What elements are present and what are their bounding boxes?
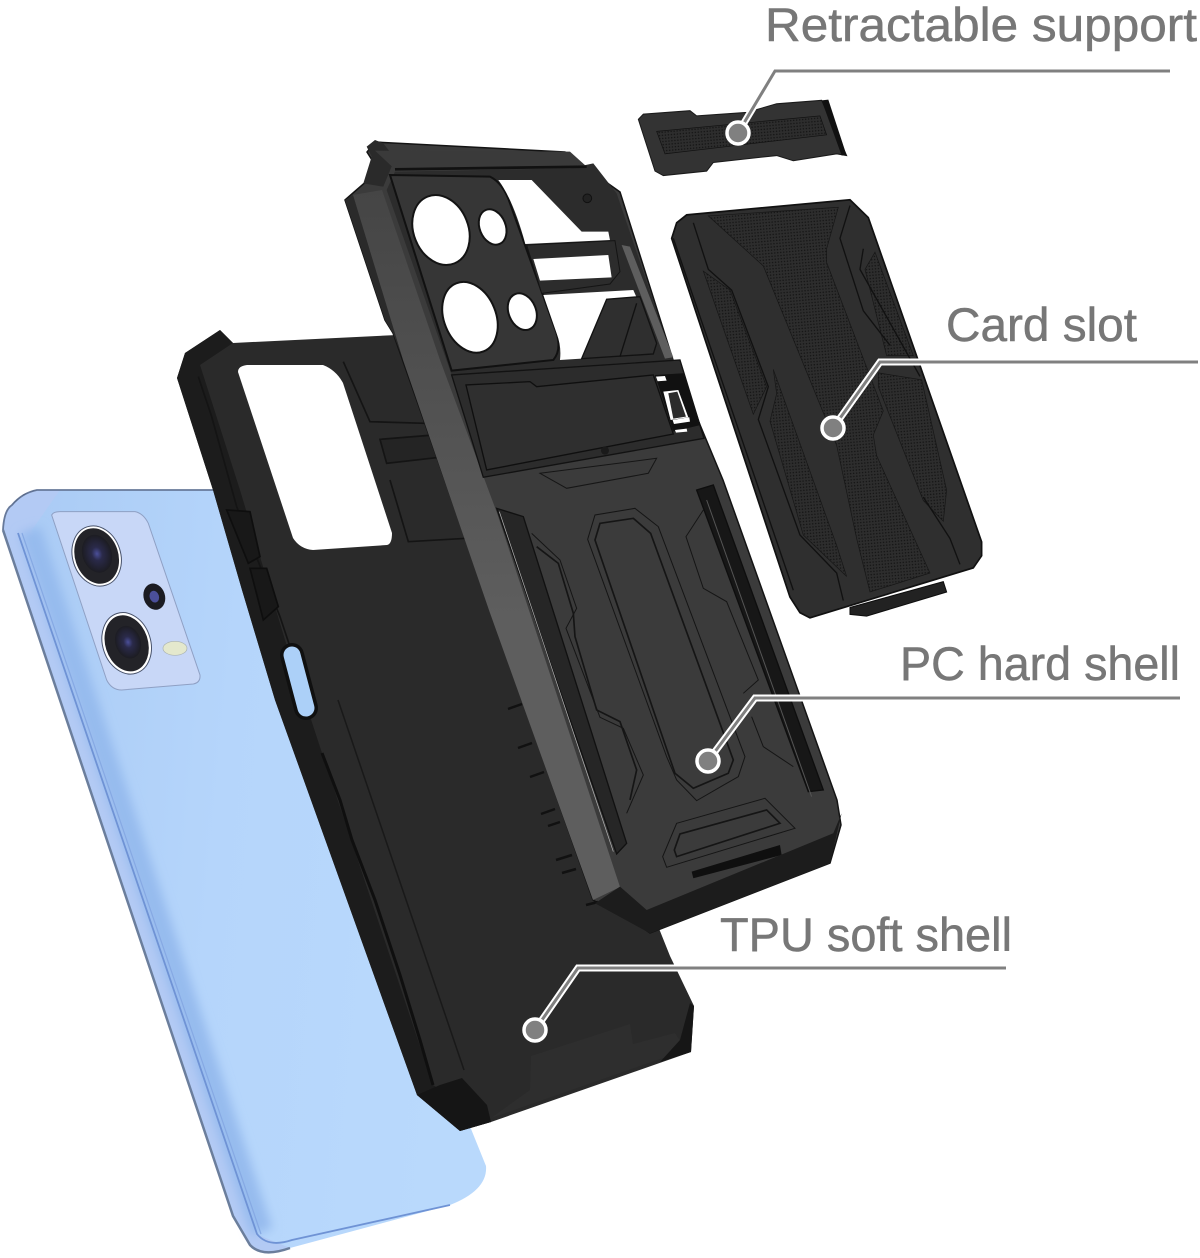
logo mark xyxy=(583,194,592,203)
TPU side button two xyxy=(250,568,278,620)
card relief lines xyxy=(673,206,960,601)
camera region xyxy=(363,140,704,488)
right card rail xyxy=(697,485,823,792)
panel: TPU soft shell xyxy=(177,330,694,1131)
flash xyxy=(163,641,187,655)
camera holes xyxy=(402,186,542,361)
lit edge strip xyxy=(353,190,620,900)
TPU lower lip xyxy=(491,1024,686,1118)
panel: phone xyxy=(3,490,486,1252)
card meshes xyxy=(703,207,947,592)
TPU edge band xyxy=(177,330,491,1131)
camera plate xyxy=(390,175,559,371)
TPU corner bumper xyxy=(417,1078,491,1131)
right silver rail xyxy=(622,245,673,359)
TPU camera window xyxy=(238,365,392,550)
side wall xyxy=(345,195,403,360)
leader line xyxy=(738,71,1170,133)
leader line xyxy=(535,968,1006,1030)
bar screw xyxy=(601,447,609,455)
TPU side button one xyxy=(227,510,260,563)
hinge slot xyxy=(655,373,701,432)
upper window xyxy=(498,180,610,244)
leader line xyxy=(708,698,1180,761)
lower window xyxy=(543,290,657,360)
left card rail xyxy=(497,508,627,854)
left emboss xyxy=(532,533,643,813)
centre emboss inner xyxy=(595,518,733,788)
card pull tab xyxy=(850,582,947,616)
TPU embossed panels xyxy=(198,362,467,717)
support grip mesh xyxy=(657,116,827,154)
small lens xyxy=(140,581,169,613)
label: TPU soft shell xyxy=(524,908,1012,1041)
centre emboss outer xyxy=(588,508,745,801)
top band xyxy=(375,151,587,169)
kickstand fold xyxy=(582,297,657,359)
bar slot xyxy=(527,241,620,293)
bottom wall xyxy=(595,813,842,933)
TPU button cutout xyxy=(292,655,306,708)
support end clip xyxy=(822,100,847,156)
TPU right corner bumper xyxy=(660,1003,694,1062)
label: Retractable support xyxy=(727,0,1197,144)
label: Card slot xyxy=(822,298,1198,439)
panel: card slot xyxy=(672,200,982,618)
right rail highlight xyxy=(707,500,812,797)
lower notch xyxy=(540,458,657,488)
kickstand bar xyxy=(452,360,704,477)
label: PC hard shell: PC hard shell xyxy=(900,637,1180,690)
label: PC hard shell xyxy=(697,637,1180,772)
main lens xyxy=(64,519,129,593)
top hinge xyxy=(363,140,395,187)
camera module xyxy=(52,512,200,690)
edge ribs xyxy=(508,704,598,905)
bottom emboss xyxy=(663,798,795,867)
panel: PC hard shell xyxy=(345,140,842,933)
panel: retractable support xyxy=(638,100,847,176)
leader line xyxy=(833,362,1198,428)
right emboss xyxy=(686,510,758,693)
second lens xyxy=(94,606,159,681)
label: Card slot: Card slot xyxy=(946,298,1137,351)
left rail highlight xyxy=(499,512,613,852)
bottom slot xyxy=(692,845,782,878)
TPU logo plate xyxy=(380,435,445,463)
back plate details xyxy=(497,485,842,933)
label: TPU soft shell: TPU soft shell xyxy=(720,908,1012,961)
